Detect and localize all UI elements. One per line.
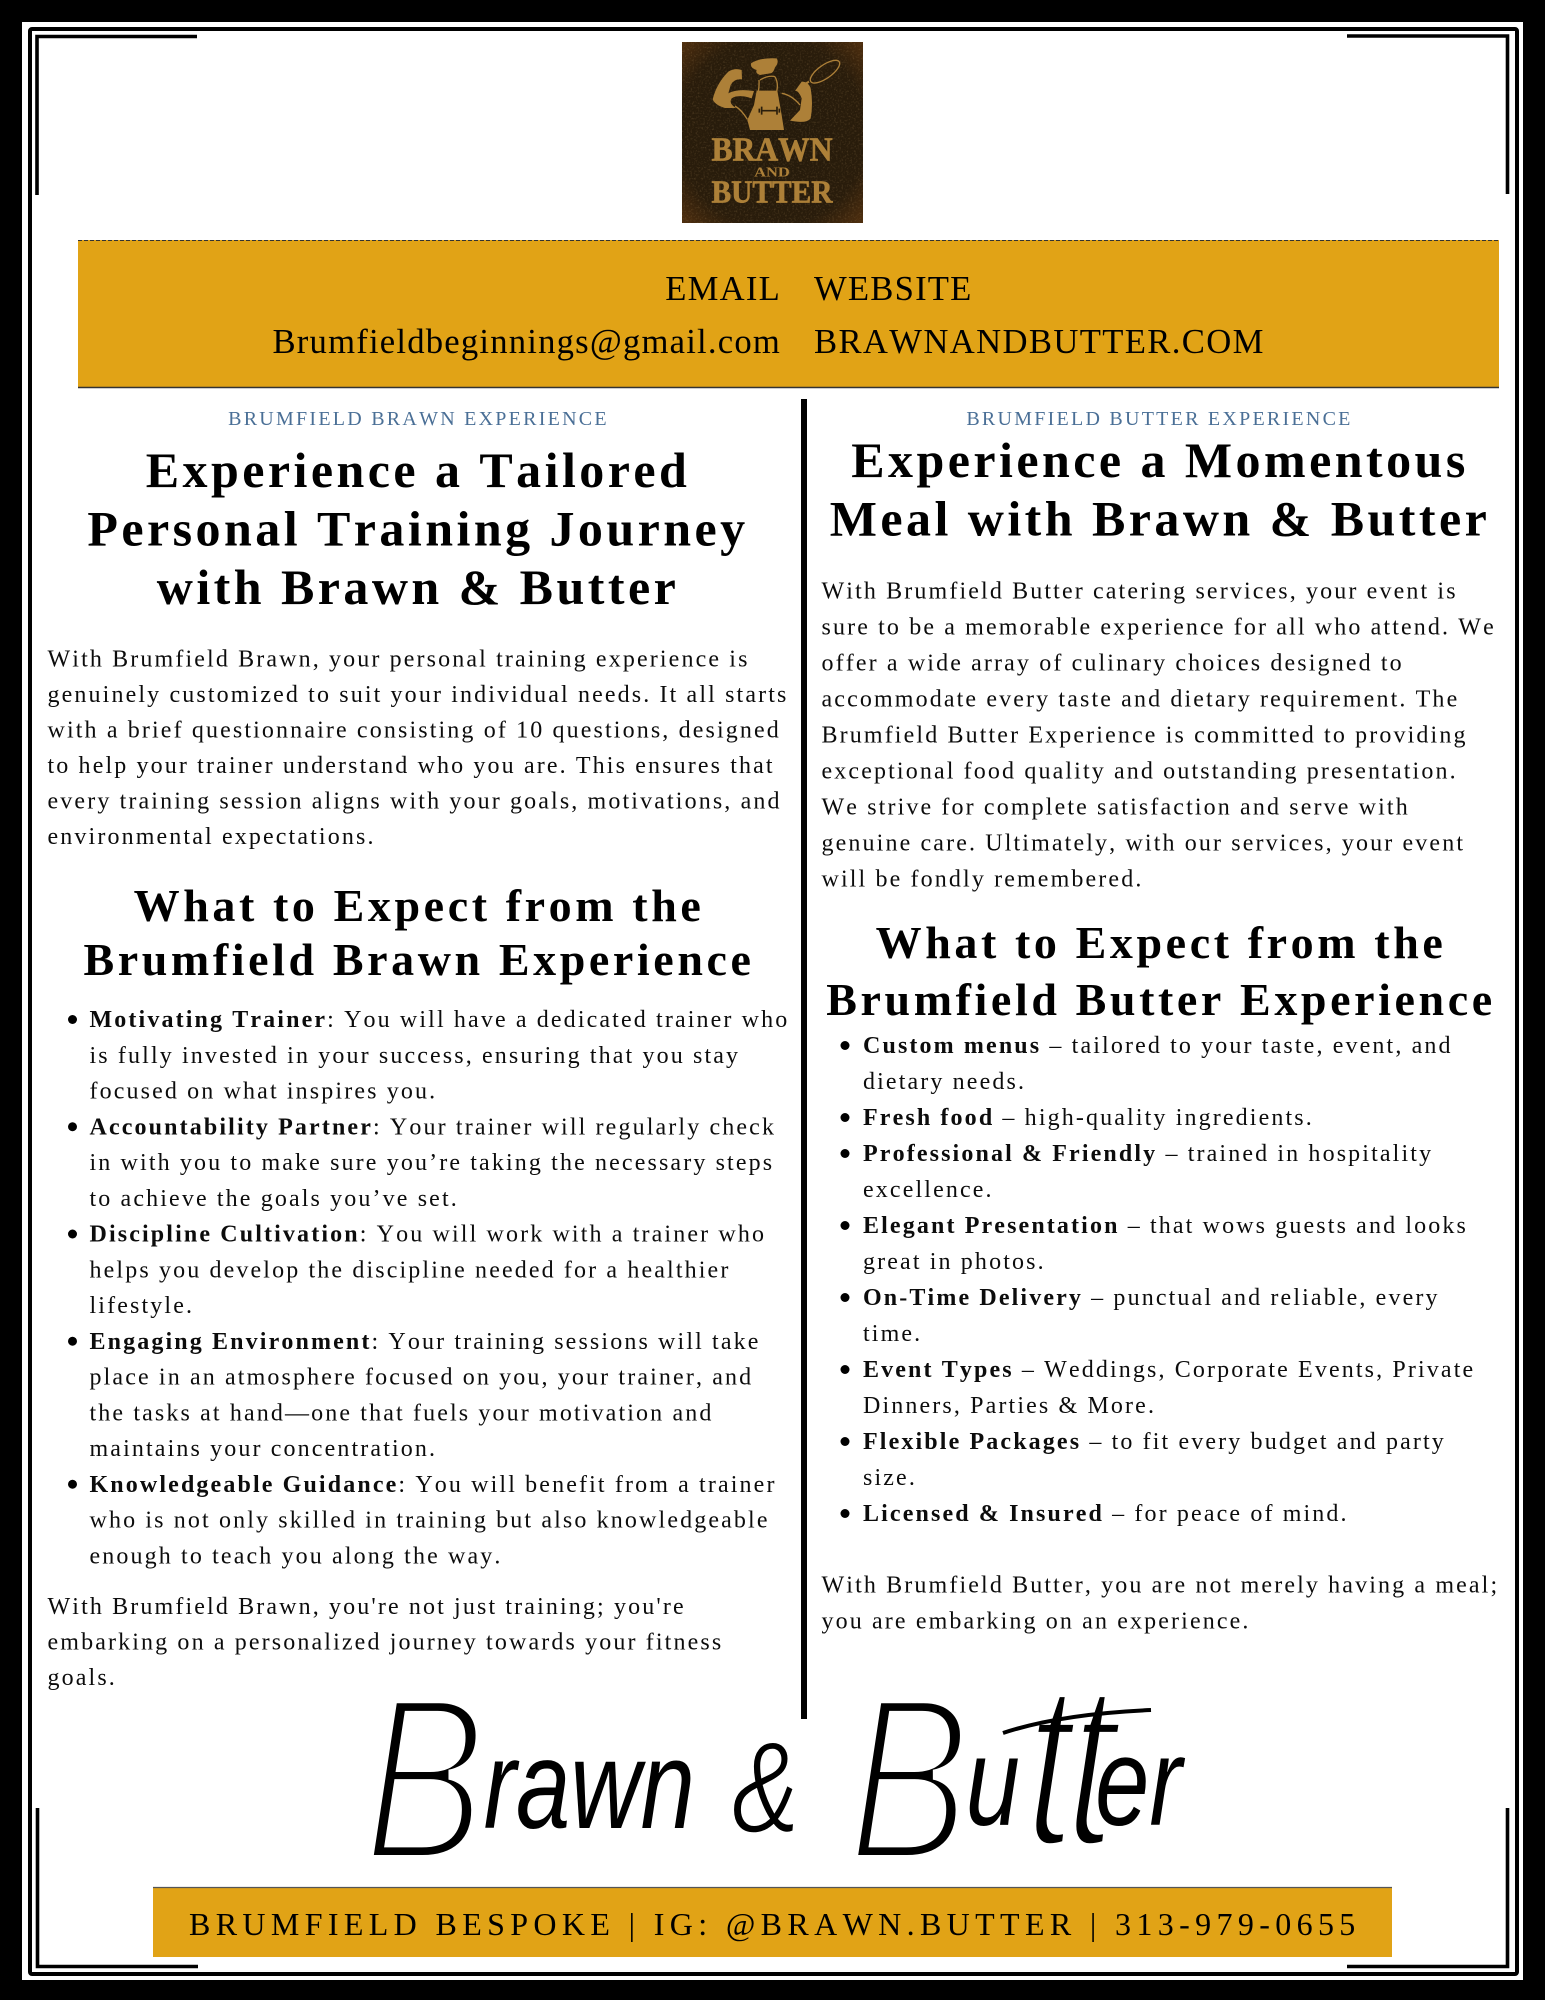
list: Butter benefits: dietary needs. bbox=[863, 1069, 1026, 1095]
list: Brawn benefits bbox=[68, 1007, 789, 1569]
text block: Brawn closing bbox=[48, 1594, 723, 1691]
list: Brawn benefits: place in an atmosphere focused on you, your trainer, and bbox=[90, 1364, 753, 1390]
list: Butter benefits: excellence. bbox=[863, 1177, 994, 1203]
list: Butter benefits: On-Time Delivery – punctual and reliable, every bbox=[863, 1285, 1440, 1311]
list: Brawn benefits: who is not only skilled in training but also knowledgeable bbox=[90, 1508, 770, 1534]
text block: Butter intro: genuine care. Ultimately, with our services, your event bbox=[822, 830, 1465, 856]
list: Butter benefits: Event Types – Weddings, Corporate Events, Private bbox=[863, 1357, 1475, 1383]
text block: Brawn closing: With Brumfield Brawn, you're not just training; you're bbox=[48, 1594, 686, 1620]
panel: Brumfield Brawn column bbox=[48, 408, 789, 1691]
list: Butter benefits: Dinners, Parties & More. bbox=[863, 1393, 1156, 1419]
footer contact line: BRUMFIELD BESPOKE | IG: @BRAWN.BUTTER | 313-979-0655 bbox=[189, 1906, 1361, 1942]
heading: Brawn journey: Personal Training Journey bbox=[87, 500, 749, 556]
email label: EMAIL bbox=[665, 270, 781, 308]
heading: Brawn journey: with Brawn & Butter bbox=[157, 559, 679, 615]
text block: Brawn intro: every training session aligns with your goals, motivations, and bbox=[48, 788, 782, 814]
list: Brawn benefits: to achieve the goals you’ve set. bbox=[90, 1186, 459, 1212]
text block: Brawn closing: embarking on a personalized journey towards your fitness bbox=[48, 1630, 723, 1656]
list: Brawn benefits: in with you to make sure you’re taking the necessary steps bbox=[90, 1150, 774, 1176]
script wordmark: Brawn & Butter: & bbox=[732, 1714, 799, 1860]
list: Butter benefits: Professional & Friendly – trained in hospitality bbox=[863, 1141, 1433, 1167]
script wordmark: Brawn & Butter: er bbox=[1095, 1712, 1186, 1852]
list: Brawn benefits: is fully invested in your success, ensuring that you stay bbox=[90, 1043, 740, 1069]
text block: Butter intro: We strive for complete satisfaction and serve with bbox=[822, 794, 1410, 820]
list: Butter benefits: great in photos. bbox=[863, 1249, 1046, 1275]
script wordmark: Brawn & Butter bbox=[363, 1632, 1186, 1910]
text block: Brawn intro bbox=[48, 646, 789, 850]
logo: Brawn and Butter chef badge bbox=[682, 42, 863, 223]
heading: Brawn journey bbox=[87, 442, 749, 615]
script wordmark: Brawn & Butter: B bbox=[848, 1647, 970, 1910]
text block: Butter intro: Brumfield Butter Experience is committed to providing bbox=[822, 722, 1468, 748]
panel: Brumfield Butter column bbox=[822, 408, 1499, 1634]
list: Butter benefits: Licensed & Insured – for peace of mind. bbox=[863, 1501, 1349, 1527]
script wordmark: Brawn & Butter: B bbox=[363, 1647, 486, 1910]
list: Brawn benefits: focused on what inspires you. bbox=[90, 1078, 437, 1104]
eyebrow: Brawn: BRUMFIELD BRAWN EXPERIENCE bbox=[228, 408, 609, 430]
text block: Brawn intro: with a brief questionnaire consisting of 10 questions, designed bbox=[48, 718, 781, 744]
text block: Brawn intro: genuinely customized to suit your individual needs. It all starts bbox=[48, 682, 789, 708]
text block: Butter intro: With Brumfield Butter catering services, your event is bbox=[822, 578, 1458, 604]
text block: Butter closing: you are embarking on an experience. bbox=[822, 1608, 1251, 1634]
text block: Butter closing: With Brumfield Butter, you are not merely having a meal; bbox=[822, 1572, 1499, 1598]
heading: what to expect from Butter: What to Expect from the bbox=[876, 917, 1446, 968]
text block: Butter intro: offer a wide array of culinary choices designed to bbox=[822, 650, 1404, 676]
website label: WEBSITE bbox=[814, 270, 973, 308]
text block: Butter intro: will be fondly remembered. bbox=[822, 866, 1143, 892]
list: Butter benefits: Flexible Packages – to fit every budget and party bbox=[863, 1429, 1446, 1455]
list: Brawn benefits: Accountability Partner: Your trainer will regularly check bbox=[90, 1114, 776, 1140]
text block: Brawn intro: to help your trainer understand who you are. This ensures that bbox=[48, 753, 775, 779]
contact band bbox=[78, 240, 1499, 388]
heading: Butter meal: Meal with Brawn & Butter bbox=[830, 490, 1490, 546]
heading: what to expect from Butter bbox=[826, 917, 1496, 1025]
list: Butter benefits: time. bbox=[863, 1321, 922, 1347]
heading: what to expect from Brawn bbox=[83, 880, 755, 985]
list: Brawn benefits: Discipline Cultivation: You will work with a trainer who bbox=[90, 1222, 766, 1248]
script wordmark: Brawn & Butter: rawn bbox=[484, 1715, 695, 1855]
footer band bbox=[153, 1887, 1392, 1957]
text block: Brawn closing: goals. bbox=[48, 1665, 117, 1691]
eyebrow: Butter: BRUMFIELD BUTTER EXPERIENCE bbox=[966, 408, 1353, 430]
heading: what to expect from Brawn: What to Expect from the bbox=[134, 880, 704, 931]
list: Butter benefits bbox=[840, 1033, 1475, 1527]
list: Brawn benefits: enough to teach you along the way. bbox=[90, 1543, 502, 1569]
list: Butter benefits: Fresh food – high-quality ingredients. bbox=[863, 1105, 1314, 1131]
list: Brawn benefits: the tasks at hand—one that fuels your motivation and bbox=[90, 1400, 713, 1426]
logo: Brawn and Butter chef badge: BUTTER bbox=[711, 175, 833, 210]
email address: Brumfieldbeginnings@gmail.com bbox=[272, 323, 781, 361]
text block: Brawn intro: With Brumfield Brawn, your personal training experience is bbox=[48, 646, 750, 672]
list: Brawn benefits: maintains your concentration. bbox=[90, 1436, 437, 1462]
list: Brawn benefits: lifestyle. bbox=[90, 1293, 194, 1319]
logo: Brawn and Butter chef badge: BRAWN bbox=[711, 132, 832, 169]
heading: Brawn journey: Experience a Tailored bbox=[146, 442, 690, 498]
logo: Brawn and Butter chef badge: AND bbox=[754, 165, 790, 180]
text block: Butter closing bbox=[822, 1572, 1499, 1634]
list: Brawn benefits: Motivating Trainer: You will have a dedicated trainer who bbox=[90, 1007, 789, 1033]
website address: BRAWNANDBUTTER.COM bbox=[814, 323, 1265, 361]
column divider bbox=[801, 399, 807, 1719]
text block: Butter intro: exceptional food quality and outstanding presentation. bbox=[822, 758, 1458, 784]
text block: Butter intro bbox=[822, 578, 1496, 892]
text block: Butter intro: accommodate every taste and dietary requirement. The bbox=[822, 686, 1459, 712]
list: Butter benefits: size. bbox=[863, 1465, 917, 1491]
heading: Butter meal bbox=[830, 432, 1490, 546]
list: Brawn benefits: Knowledgeable Guidance: You will benefit from a trainer bbox=[90, 1472, 777, 1498]
list: Brawn benefits: helps you develop the discipline needed for a healthier bbox=[90, 1257, 730, 1283]
text block: Butter intro: sure to be a memorable experience for all who attend. We bbox=[822, 614, 1496, 640]
heading: what to expect from Butter: Brumfield Butter Experience bbox=[826, 974, 1496, 1025]
list: Butter benefits: Custom menus – tailored to your taste, event, and bbox=[863, 1033, 1453, 1059]
list: Butter benefits: Elegant Presentation – that wows guests and looks bbox=[863, 1213, 1468, 1239]
text block: Brawn intro: environmental expectations. bbox=[48, 824, 376, 850]
list: Brawn benefits: Engaging Environment: Your training sessions will take bbox=[90, 1329, 761, 1355]
heading: what to expect from Brawn: Brumfield Brawn Experience bbox=[83, 934, 755, 985]
script wordmark: Brawn & Butter: u bbox=[966, 1712, 1020, 1852]
heading: Butter meal: Experience a Momentous bbox=[851, 432, 1469, 488]
script wordmark: Brawn & Butter: tt bbox=[1025, 1632, 1122, 1895]
